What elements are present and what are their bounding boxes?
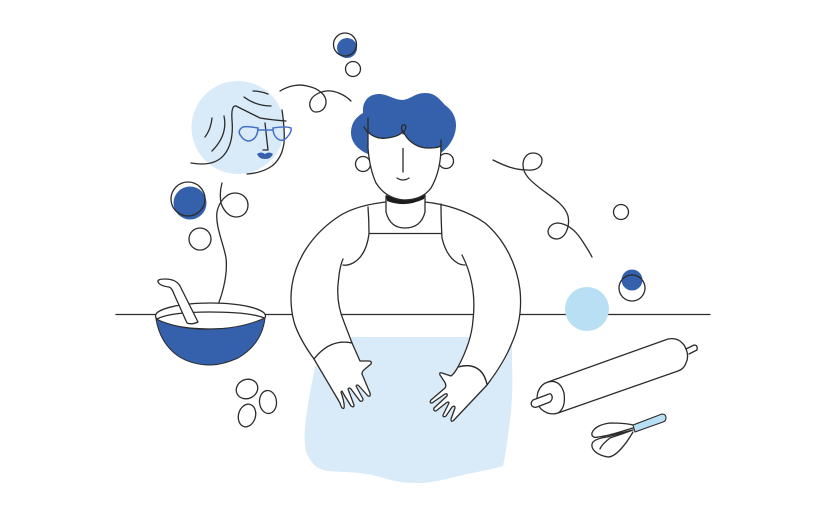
egg	[236, 402, 258, 429]
eggs	[233, 376, 277, 429]
whisk handle	[633, 414, 666, 432]
wires	[592, 423, 633, 457]
counter line	[116, 314, 710, 316]
right ear	[438, 154, 454, 168]
pale dot on counter	[565, 287, 609, 331]
nose	[263, 123, 268, 150]
outline	[334, 33, 356, 56]
bubbles top	[334, 33, 360, 76]
squiggle right	[493, 153, 592, 257]
left ear	[356, 156, 370, 172]
small bubble	[189, 228, 211, 250]
left hand	[314, 342, 371, 408]
bowl body	[156, 318, 265, 365]
blue dot	[174, 186, 206, 220]
apron lower panel	[305, 337, 512, 483]
left arm	[291, 202, 386, 359]
end cap	[548, 381, 564, 413]
right handle	[686, 345, 697, 354]
bubble with blue dot	[619, 270, 645, 301]
face	[368, 131, 441, 200]
pale circle	[192, 81, 284, 174]
bubble right	[614, 204, 628, 220]
rolling pin	[531, 339, 697, 414]
egg	[233, 376, 261, 402]
hairline strokes	[364, 118, 441, 151]
hair	[351, 93, 456, 160]
whisk	[592, 414, 666, 457]
spoon	[158, 279, 198, 324]
barrel	[537, 339, 688, 414]
lips	[257, 152, 273, 159]
baker figure	[291, 93, 521, 421]
bib and straps	[343, 204, 465, 265]
blue dot	[337, 38, 357, 58]
hair strands	[191, 91, 286, 164]
smile	[397, 178, 409, 180]
glasses	[239, 127, 291, 141]
outline	[619, 275, 645, 301]
egg	[259, 390, 277, 414]
face outline	[247, 110, 284, 174]
collar	[386, 195, 425, 204]
blue dot	[622, 270, 642, 290]
outline	[171, 182, 205, 216]
whisper circle: face memory	[191, 81, 291, 174]
left handle	[531, 394, 552, 407]
neck	[386, 195, 425, 228]
bubbles left	[171, 182, 211, 250]
inner rim	[157, 312, 264, 319]
bowl	[156, 279, 266, 365]
right hand	[430, 366, 487, 421]
small bubble	[346, 62, 360, 76]
squiggle top	[280, 85, 351, 112]
nose	[402, 148, 404, 172]
steam squiggle from bowl	[212, 183, 248, 317]
right arm	[425, 202, 521, 385]
bowl interior	[156, 303, 266, 329]
